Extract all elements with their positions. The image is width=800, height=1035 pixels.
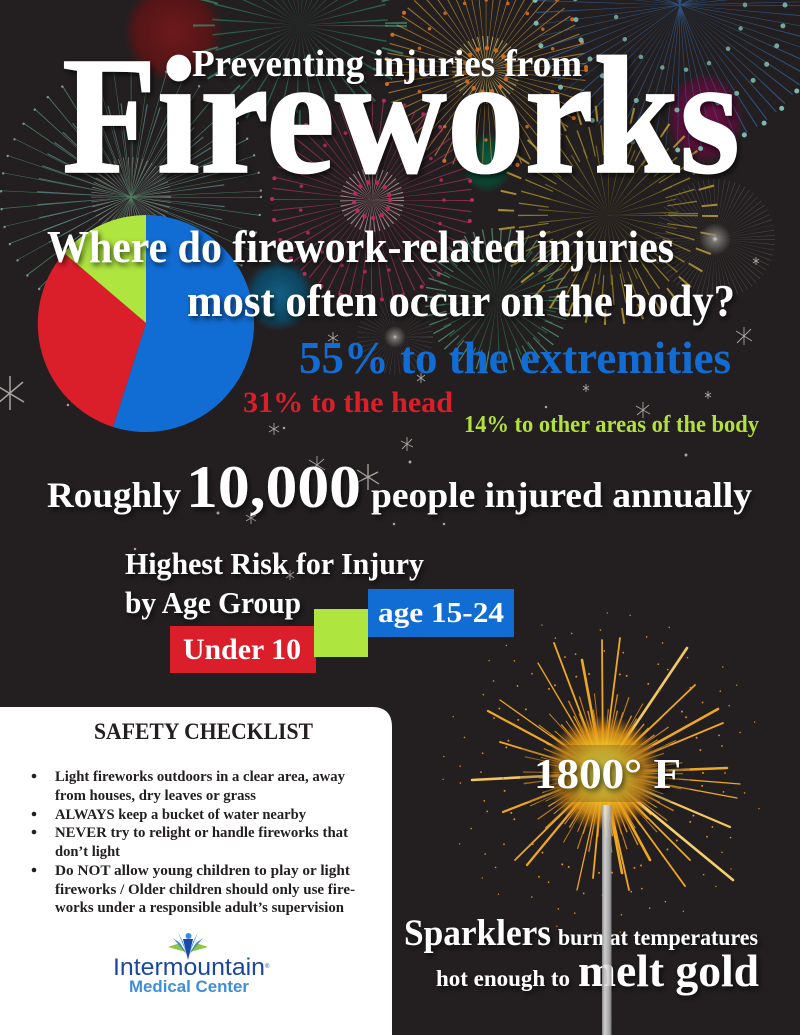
burst: dark green top — [204, 0, 396, 121]
burst: blue top right — [535, 0, 800, 150]
small sparkle stars — [0, 257, 759, 580]
heading: injury question — [47, 222, 735, 326]
caption line 2 small: hot enough to — [436, 966, 570, 991]
fireworks backdrop — [0, 0, 800, 580]
logo registered mark: ® — [265, 963, 270, 970]
question line 2: most often occur on the body? — [187, 276, 735, 326]
logo icon — [168, 932, 208, 960]
heading: highest risk — [125, 546, 424, 620]
panel background — [0, 707, 392, 1035]
checklist text: from houses, dry leaves or grass — [55, 788, 256, 804]
checklist text: ALWAYS keep a bucket of water nearby — [55, 807, 307, 823]
pie chart: injury locations — [38, 215, 254, 432]
sparkler stick — [602, 805, 612, 1035]
block: age 15-24: age 15-24 — [378, 597, 504, 629]
stat: head: 31% to the head — [243, 386, 453, 419]
caption line 2 large: melt gold — [578, 945, 759, 996]
sparkler rays — [472, 638, 740, 890]
people injured annually: people injured annually — [371, 475, 752, 515]
stat: extremities: 55% to the extremities — [299, 332, 731, 383]
glow ball: blue — [244, 259, 314, 331]
burst: green lower — [435, 238, 559, 362]
burst: orange top — [386, 0, 586, 170]
checklist text: NEVER try to relight or handle fireworks that — [55, 825, 348, 841]
sparkler core — [545, 715, 661, 831]
panel: safety checklist — [0, 707, 392, 1035]
glow ball: green — [461, 133, 513, 193]
checklist text — [55, 769, 355, 916]
caption line 1 small: burn at temperatures — [558, 925, 758, 950]
age group staircase — [170, 589, 514, 673]
subtitle: Preventing injuries from — [192, 43, 582, 85]
block: under 10 — [170, 626, 316, 673]
burst: yellow — [506, 113, 710, 317]
checklist heading: SAFETY CHECKLIST — [94, 719, 313, 744]
burst: pink — [272, 100, 472, 300]
glow ball: red — [123, 0, 223, 82]
temperature label: 1800° F — [534, 752, 681, 798]
10,000: 10,000 — [186, 454, 361, 520]
logo wordmark: Intermountain — [113, 954, 265, 981]
caption line 1 large: Sparklers — [404, 913, 551, 954]
slice: other 14% — [64, 215, 146, 323]
glow ball: magenta — [666, 72, 744, 164]
sparkler embers — [443, 613, 763, 933]
checklist text: works under a responsible adult’s supervision — [55, 900, 344, 916]
block: green step — [314, 609, 368, 657]
bullets — [32, 774, 36, 872]
title: Fireworks: Fireworks — [62, 23, 740, 209]
risk line 1: Highest Risk for Injury — [125, 546, 424, 581]
title — [62, 23, 740, 209]
burst: grey star right — [685, 209, 745, 269]
sparkler — [443, 613, 763, 933]
slice: head 31% — [38, 253, 146, 427]
burst: grey star lower — [376, 318, 414, 356]
block: age 15-24 — [368, 589, 514, 637]
caption: sparklers melt gold — [404, 913, 759, 996]
stat: annual injuries — [47, 454, 752, 520]
checklist text: don’t light — [55, 844, 120, 860]
block: under 10: Under 10 — [183, 633, 301, 666]
stat: other areas: 14% to other areas of the body — [464, 412, 759, 438]
checklist text: fireworks / Older children should only use fire- — [55, 882, 355, 898]
logo: Intermountain Medical Center — [113, 932, 270, 996]
Roughly: Roughly — [47, 475, 181, 515]
logo subline: Medical Center — [129, 977, 249, 996]
checklist text: Light fireworks outdoors in a clear area, away — [55, 769, 346, 785]
burst: large green — [1, 67, 261, 327]
temperature label backing — [520, 745, 690, 802]
question line 1: Where do firework-related injuries — [47, 222, 674, 272]
slice: extremities 55% — [113, 215, 254, 432]
checklist text: Do NOT allow young children to play or light — [55, 863, 350, 879]
risk line 2: by Age Group — [125, 585, 301, 620]
